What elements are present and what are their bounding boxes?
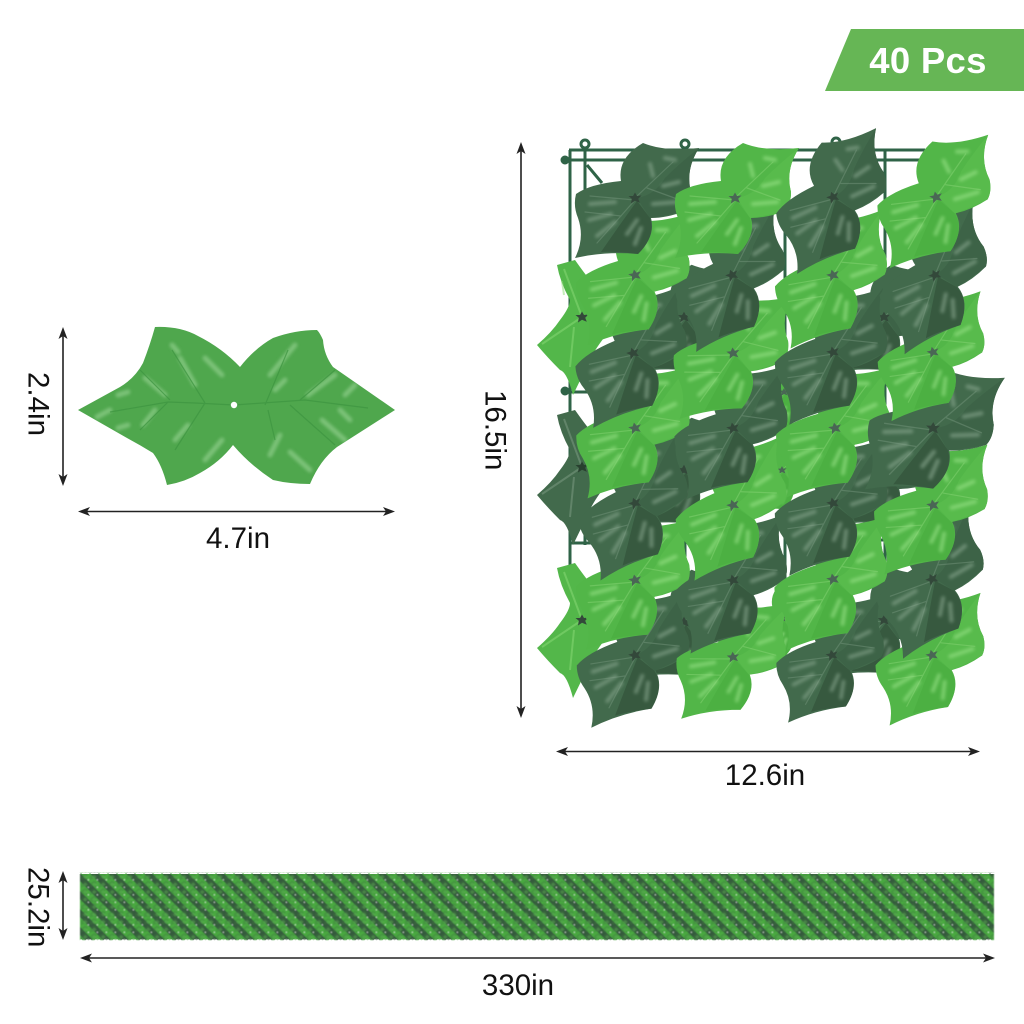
panel width 12.6in xyxy=(556,747,980,792)
row 1 clusters xyxy=(575,123,1011,274)
row 6 clusters xyxy=(566,502,1015,659)
row 2 clusters xyxy=(565,199,1018,354)
left edge leaves xyxy=(537,260,610,698)
dimension: leaf height 2.4in: 2.4in xyxy=(22,372,54,436)
dimension: leaf height 2.4in xyxy=(22,327,68,486)
row 7 clusters xyxy=(563,586,1006,728)
panel height 16.5in xyxy=(478,142,526,718)
panel height 16.5in: 16.5in xyxy=(478,390,512,470)
row 5 clusters xyxy=(559,429,1006,581)
single leaf illustration xyxy=(78,327,395,485)
plastic lattice frame xyxy=(562,138,925,610)
dimension: leaf width 4.7in xyxy=(78,507,395,555)
panel width 12.6in: 12.6in xyxy=(725,759,805,792)
dimension: roll height 25.2in: 25.2in xyxy=(22,867,54,947)
dimension: leaf width 4.7in: 4.7in xyxy=(206,522,270,555)
leaf panel with lattice xyxy=(537,123,1018,728)
row 3 clusters xyxy=(559,282,1006,428)
full-length leaf roll strip xyxy=(78,871,996,942)
dimension: roll length 330in xyxy=(80,954,995,1002)
badge: 40 Pcs xyxy=(825,29,1024,91)
row 4 clusters xyxy=(565,361,1005,499)
badge: 40 Pcs: 40 Pcs xyxy=(869,40,987,81)
dimension: roll length 330in: 330in xyxy=(482,969,554,1002)
back layer leaves xyxy=(627,265,945,679)
